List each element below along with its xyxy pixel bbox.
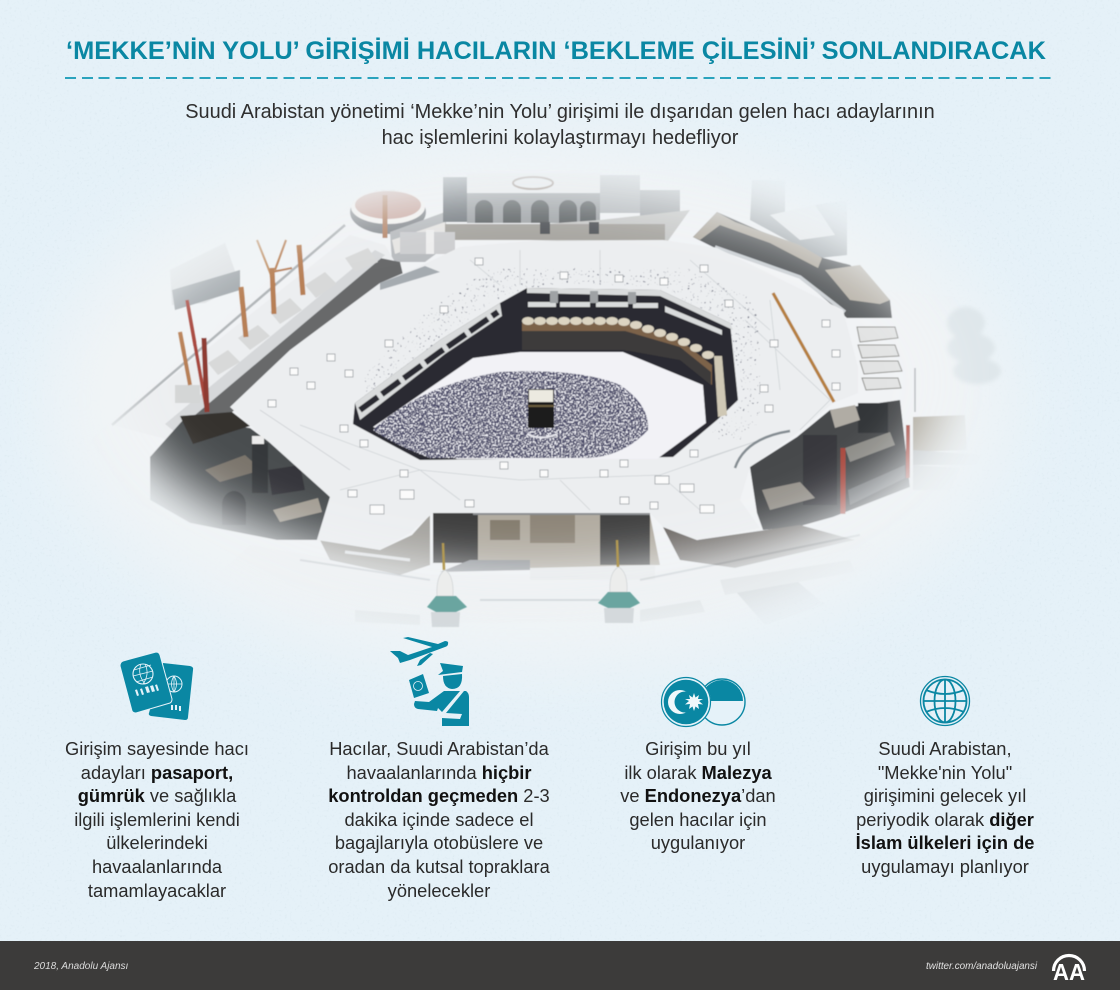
text: column 1: havaalanlarında bbox=[92, 856, 222, 877]
lower left dark block bbox=[150, 412, 330, 540]
text: column 1: tamamlayacaklar bbox=[88, 880, 226, 901]
icon: plane and passport officer bbox=[390, 637, 469, 726]
text: column 4 bbox=[856, 738, 1034, 877]
text: column 3: uygulanıyor bbox=[651, 832, 745, 853]
text: column 4: "Mekke'nin Yolu" bbox=[878, 762, 1012, 783]
text: column 4: uygulamayı planlıyor bbox=[861, 856, 1029, 877]
east colonnade bbox=[714, 356, 727, 417]
icon: globe bbox=[920, 676, 970, 726]
footer bar bbox=[0, 941, 1120, 990]
lower roof edge bbox=[473, 513, 650, 515]
text: column 1 bbox=[65, 738, 249, 901]
minarets bbox=[427, 540, 640, 627]
south construction yards bbox=[320, 513, 855, 580]
right balconies bbox=[857, 327, 902, 390]
text: column 2: yönelecekler bbox=[388, 880, 490, 901]
text: column 2: kontroldan geçmeden 2-3 bbox=[328, 785, 550, 806]
top building bbox=[443, 173, 690, 245]
text: column 1: gümrük ve sağlıkla bbox=[78, 785, 236, 806]
text: column 4: Suudi Arabistan, bbox=[878, 738, 1012, 759]
footer twitter: twitter.com/anadoluajansi bbox=[926, 961, 1037, 972]
text: column 4: periyodik olarak diğer bbox=[856, 809, 1034, 830]
text: column 1: adayları pasaport, bbox=[81, 762, 233, 783]
text: column 4: girişimini gelecek yıl bbox=[864, 785, 1026, 806]
text: column 2 bbox=[328, 738, 550, 901]
text: column 2: bagajlarıyla otobüslere ve bbox=[335, 832, 543, 853]
mosque buildings and roof bbox=[90, 170, 990, 590]
roof tile lines bbox=[260, 250, 830, 510]
yellow crane bbox=[773, 293, 834, 402]
lower right dark block bbox=[750, 400, 985, 530]
subtitle bbox=[185, 101, 935, 149]
icon: Malaysia and Indonesia flags bbox=[660, 676, 746, 728]
text: column 2: dakika içinde sadece el bbox=[344, 809, 534, 830]
left wing bbox=[112, 225, 455, 440]
text: column 2: havaalanlarında hiçbir bbox=[347, 762, 531, 783]
crowd bbox=[373, 371, 648, 458]
plaza ground bbox=[150, 203, 910, 580]
text: column 3 bbox=[620, 738, 776, 853]
text: column 3: gelen hacılar için bbox=[629, 809, 767, 830]
colonnade bbox=[522, 323, 712, 385]
faint domes on the right bbox=[947, 307, 1001, 384]
courtyard well bbox=[353, 288, 738, 460]
background and mosque aerial photo bbox=[60, 150, 1000, 791]
pale snow-white plaza glow bbox=[50, 135, 1010, 665]
footer credit: 2018, Anadolu Ajansı bbox=[34, 961, 128, 972]
roof kiosks bbox=[268, 258, 840, 514]
title: ‘MEKKE’NİN YOLU’ GİRİŞİMİ HACILARIN ‘BEKLEME ÇİLESİNİ’ SONLANDIRACAK bbox=[66, 37, 1046, 65]
domes bbox=[522, 317, 714, 359]
lower plaza with railings and minaret bases bbox=[300, 534, 860, 620]
text: column 1: ilgili işlemlerini kendi bbox=[74, 809, 240, 830]
text: column 2: Hacılar, Suudi Arabistan’da bbox=[329, 738, 549, 759]
upper right fading blocks bbox=[750, 180, 847, 258]
text: column 1: ülkelerindeki bbox=[106, 832, 208, 853]
icon: passports bbox=[120, 652, 194, 720]
Kaaba bbox=[527, 389, 557, 438]
subtitle: Suudi Arabistan yönetimi ‘Mekke’nin Yolu’ girişimi ile dışarıdan gelen hacı adaylarının bbox=[185, 101, 935, 123]
roof people bbox=[365, 268, 760, 440]
right wing bbox=[693, 212, 892, 318]
text: column 4: İslam ülkeleri için de bbox=[856, 832, 1034, 853]
text: column 2: oradan da kutsal topraklara bbox=[328, 856, 550, 877]
text: column 3: ve Endonezya’dan bbox=[620, 785, 776, 806]
text: column 1: Girişim sayesinde hacı bbox=[65, 738, 249, 759]
gallery left bbox=[355, 303, 502, 420]
subtitle: hac işlemlerini kolaylaştırmayı hedefliyor bbox=[382, 127, 738, 149]
courtyard floor bbox=[373, 352, 706, 459]
upper gallery bbox=[527, 288, 733, 335]
left fading building bbox=[172, 248, 234, 304]
text: column 3: Girişim bu yıl bbox=[645, 738, 751, 759]
cranes bbox=[180, 195, 385, 412]
construction ramps bbox=[735, 431, 790, 468]
text: column 3: ilk olarak Malezya bbox=[624, 762, 772, 783]
main roof bbox=[230, 240, 858, 550]
round dome building bbox=[350, 190, 426, 234]
